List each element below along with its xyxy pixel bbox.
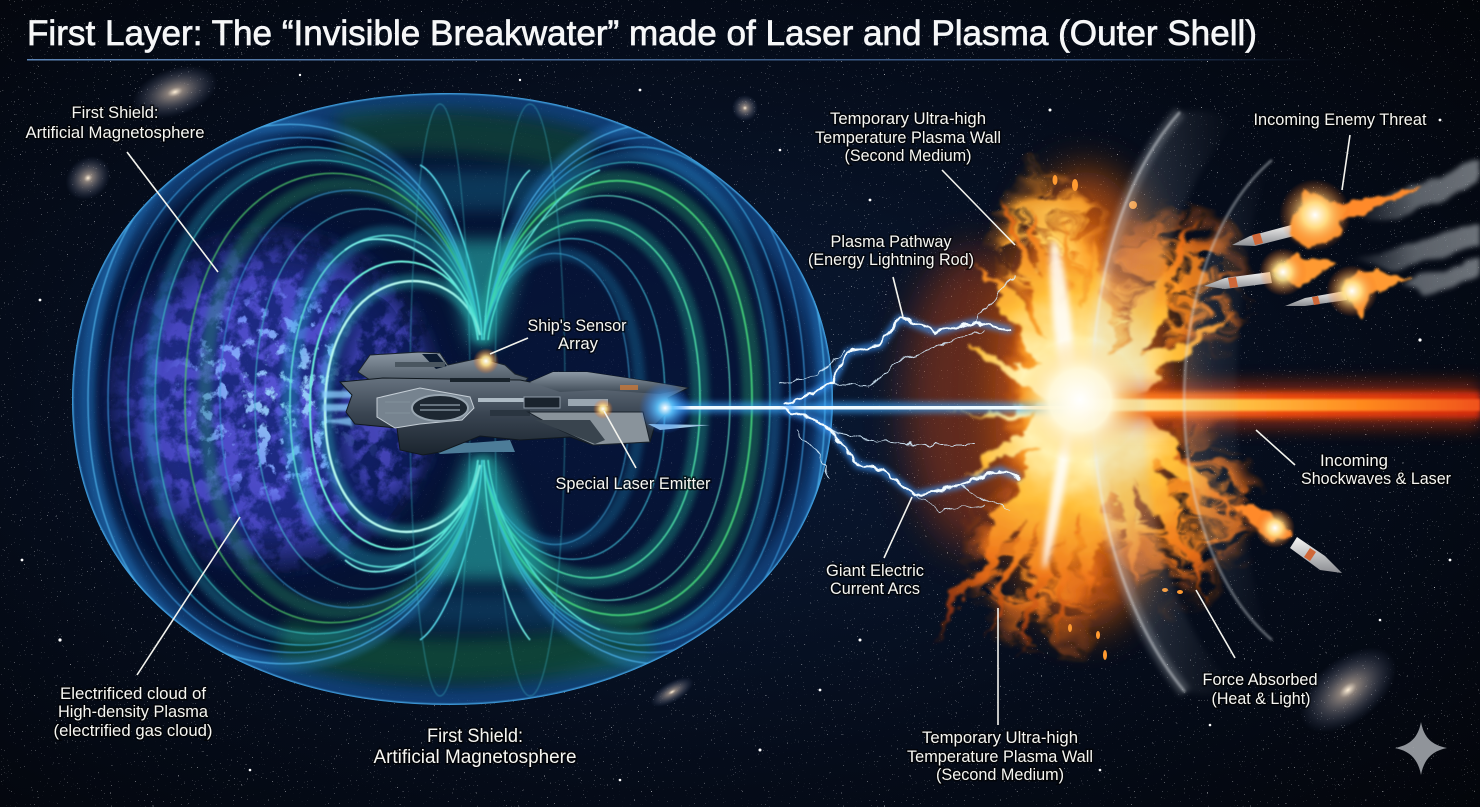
plasma cloud	[100, 220, 450, 580]
label: plasma wall bottom: Temporary Ultra-high	[922, 728, 1078, 747]
label: electric arcs: Giant Electric	[826, 561, 924, 580]
dark inner hole left	[327, 295, 417, 525]
label: force absorbed	[1196, 590, 1318, 708]
label: plasma pathway: Plasma Pathway	[830, 232, 952, 251]
label: shockwaves: Shockwaves & Laser	[1301, 469, 1451, 488]
title rule	[27, 59, 1317, 60]
main hull	[340, 372, 688, 455]
label: sensor array: Array	[558, 334, 598, 353]
inner shell edge	[1184, 160, 1272, 640]
fire: plasma wall	[905, 165, 1265, 660]
left red haze	[905, 250, 1045, 550]
shield soft bands	[72, 93, 833, 705]
label: first shield top: First Shield:	[72, 103, 158, 122]
explosion core	[1018, 338, 1142, 462]
label: electrified cloud	[54, 517, 240, 740]
smoke trails	[1350, 158, 1480, 296]
throat glow	[420, 240, 550, 580]
hot underlay	[1002, 195, 1142, 605]
outer shell edge	[1092, 112, 1185, 692]
label: plasma wall top: Temperature Plasma Wall	[815, 128, 1001, 147]
hull details	[395, 362, 638, 416]
label: plasma wall top: Temporary Ultra-high	[830, 109, 986, 128]
missile 1	[1232, 224, 1298, 246]
emitter glow	[593, 399, 613, 419]
missile 3	[1285, 291, 1347, 306]
outer shell glow	[1092, 112, 1185, 692]
label: plasma wall bottom	[907, 608, 1093, 784]
label: sensor array: Ship's Sensor	[528, 316, 627, 335]
icon: sparkle	[1395, 722, 1447, 775]
label: force absorbed: (Heat & Light)	[1212, 689, 1310, 708]
engine slots	[385, 402, 460, 413]
sensor glow	[473, 348, 499, 374]
label: laser emitter	[556, 411, 711, 493]
label: sensor array	[490, 316, 627, 354]
label: first shield bottom: First Shield:	[427, 726, 523, 747]
label: electrified cloud: Electrificed cloud of	[60, 684, 206, 703]
broad orange haze	[995, 170, 1175, 630]
label: plasma wall bottom: (Second Medium)	[936, 765, 1064, 784]
panel: artificial magnetosphere shield	[72, 93, 833, 705]
shield body	[72, 93, 833, 705]
side antenna	[648, 424, 710, 430]
galaxies	[57, 56, 1412, 750]
label: first shield top	[26, 103, 218, 272]
shockwave shells	[1092, 111, 1272, 695]
outer shell fill	[1092, 111, 1233, 695]
blast cores	[1279, 179, 1351, 251]
label: plasma pathway	[808, 232, 974, 317]
lower fin blue	[420, 440, 515, 454]
flame spikes	[930, 195, 1245, 655]
flame patches	[960, 165, 1265, 660]
inner shell fill	[1184, 160, 1272, 640]
label: first shield top: Artificial Magnetosphere	[26, 123, 204, 142]
field line wrapper clipped to shield	[72, 93, 833, 705]
label: plasma wall bottom: Temperature Plasma Wall	[907, 747, 1093, 766]
label: enemy threat: Incoming Enemy Threat	[1254, 110, 1427, 129]
label: electric arcs: Current Arcs	[830, 579, 920, 598]
label: shockwaves	[1256, 430, 1451, 488]
inner hole texture	[337, 290, 433, 520]
blast flames	[1232, 187, 1425, 542]
label: plasma wall top	[815, 109, 1015, 245]
label: laser emitter: Special Laser Emitter	[556, 474, 711, 493]
label: first shield bottom: Artificial Magnetosphere	[374, 747, 576, 768]
missile 2	[1204, 272, 1272, 289]
label: electric arcs	[826, 497, 924, 598]
label: shockwaves: Incoming	[1320, 451, 1388, 470]
lightning: plasma pathway	[780, 275, 1020, 510]
label: electrified cloud: High-density Plasma	[58, 702, 209, 721]
label: enemy threat	[1254, 110, 1427, 190]
label: electrified cloud: (electrified gas cloud)	[54, 721, 212, 740]
enemy missiles and blasts	[1204, 179, 1425, 573]
incoming red laser	[1085, 382, 1480, 428]
engine nacelle	[377, 388, 474, 428]
white core streaks	[1038, 239, 1079, 570]
spaceship	[322, 348, 710, 455]
field line ribbons	[88, 124, 825, 664]
blue laser beam	[639, 382, 1085, 434]
label: plasma pathway: (Energy Lightning Rod)	[808, 250, 974, 269]
field lines	[72, 93, 833, 705]
label: force absorbed: Force Absorbed	[1202, 670, 1318, 689]
plate shadow	[535, 420, 605, 444]
lower plate	[528, 412, 650, 445]
thruster streaks	[322, 391, 358, 426]
label: first shield bottom	[374, 726, 576, 768]
label: plasma wall top: (Second Medium)	[844, 146, 972, 165]
upper bow plate	[530, 372, 688, 394]
upper rear module	[358, 352, 528, 390]
flying embers	[1052, 175, 1183, 660]
title: First Layer: The “Invisible Breakwater” made of Laser and Plasma (Outer Shell)	[27, 14, 1257, 53]
missile 4	[1290, 537, 1342, 573]
